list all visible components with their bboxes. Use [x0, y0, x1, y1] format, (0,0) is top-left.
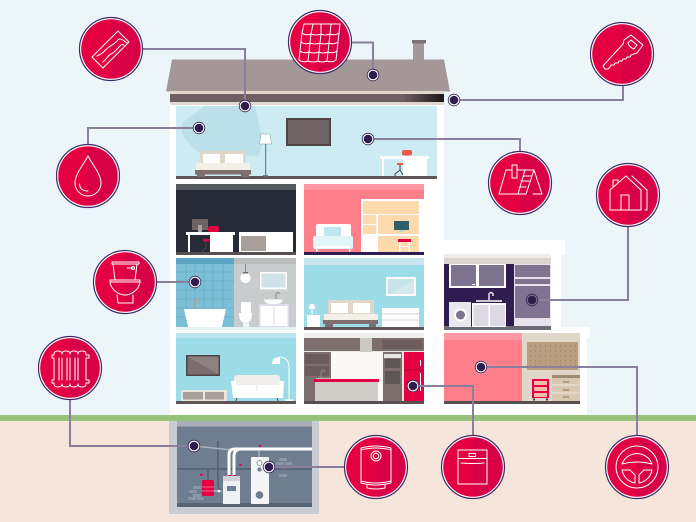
living room tv	[186, 355, 220, 376]
connector: dishwasher to kitchen	[413, 386, 473, 435]
room: attic	[176, 106, 437, 179]
connector: radiator to basement	[70, 400, 194, 446]
red valves	[200, 445, 261, 477]
marker: hot water tank	[263, 461, 275, 473]
bed	[195, 151, 251, 177]
tall cabinet	[304, 352, 331, 402]
grass strip	[0, 415, 696, 421]
annex upper wall	[444, 254, 561, 329]
back wall	[331, 352, 383, 401]
icon: radiator	[38, 336, 102, 400]
marker: facade	[448, 94, 460, 106]
connector: tiles to roof	[352, 42, 373, 75]
expansion vessel	[202, 480, 222, 496]
wooden drawers	[552, 375, 580, 401]
marker: attic	[362, 133, 374, 145]
marker: eave	[239, 100, 251, 112]
icon: roof measure	[488, 152, 552, 214]
nightstand with lamp	[307, 304, 320, 327]
marker: garage	[475, 361, 487, 373]
marker: basement pipes	[188, 440, 200, 452]
boiler	[223, 476, 240, 504]
ground	[0, 420, 696, 522]
room: living room	[176, 333, 296, 404]
sky background	[0, 0, 696, 416]
hot water tank	[251, 457, 269, 504]
icon: wood plank	[80, 18, 142, 80]
icon: toilet	[94, 250, 156, 314]
sink cabinet	[472, 292, 506, 327]
icon: water drop	[56, 144, 120, 208]
ceiling lamp	[240, 264, 251, 283]
connector: toilet to bathroom	[157, 281, 195, 283]
pink room bed	[313, 224, 353, 252]
icon: house	[596, 164, 660, 226]
pale feed pipe	[194, 446, 232, 450]
white pipes	[229, 449, 312, 476]
wall mirror	[386, 277, 416, 296]
storage column	[514, 264, 551, 326]
room: pink bedroom	[304, 184, 424, 255]
marker: laundry	[526, 294, 538, 306]
vanity	[259, 292, 289, 327]
dresser	[382, 308, 419, 327]
bathtub	[184, 298, 226, 327]
desk and chair	[380, 150, 429, 176]
blue room bed	[323, 300, 378, 327]
annex upper roof	[444, 240, 565, 255]
icon: roof tiles	[288, 10, 352, 74]
room: laundry	[444, 254, 551, 330]
room: basement	[169, 421, 319, 514]
room: dark office	[176, 184, 296, 255]
annex lower wall	[444, 333, 587, 415]
icon: steering wheel	[606, 436, 668, 498]
roof	[166, 60, 450, 92]
arc floor lamp	[272, 357, 293, 401]
console	[181, 390, 227, 401]
room: blue bedroom	[304, 258, 424, 330]
pegboard	[527, 342, 578, 370]
chimney	[412, 40, 426, 61]
stool	[398, 239, 411, 252]
eaves	[170, 91, 444, 106]
room: bathroom	[176, 258, 296, 330]
connector: wood to attic eave	[142, 49, 245, 106]
marker: damp patch	[193, 122, 205, 134]
connector: ruler to attic	[368, 139, 520, 151]
tv	[286, 118, 331, 146]
office cabinet	[239, 232, 293, 252]
marker: fridge	[407, 380, 419, 392]
bricks	[188, 458, 292, 500]
wall cabinets	[304, 338, 424, 351]
floor lamp	[260, 134, 272, 176]
icon: water heater	[344, 436, 408, 498]
cooker hood	[356, 338, 376, 364]
upper cupboards	[449, 264, 506, 288]
tool trolley	[532, 379, 549, 401]
shelving unit	[361, 199, 424, 252]
connector: water heater to tank	[269, 466, 345, 468]
icon: hand saw	[590, 22, 654, 86]
house main body	[170, 105, 444, 415]
annex lower roof	[444, 327, 590, 338]
toilet	[239, 302, 252, 327]
water stain	[182, 106, 262, 156]
connector: steering wheel to garage	[481, 367, 637, 435]
room: garage	[444, 333, 580, 404]
washing machine	[449, 302, 471, 327]
bathroom mirror	[259, 272, 288, 290]
icon: dishwasher	[442, 436, 504, 498]
ovens	[383, 352, 402, 402]
connector: drop to damp patch	[88, 128, 199, 144]
dark pipes	[177, 441, 312, 490]
connector: saw to eave	[454, 85, 623, 100]
marker: bathroom	[189, 276, 201, 288]
sofa	[231, 375, 284, 401]
room: kitchen	[304, 333, 424, 404]
connector: house to laundry	[532, 226, 628, 300]
marker: roof	[367, 69, 379, 81]
island	[314, 370, 379, 401]
fridge	[404, 352, 424, 401]
office desk	[186, 219, 235, 252]
